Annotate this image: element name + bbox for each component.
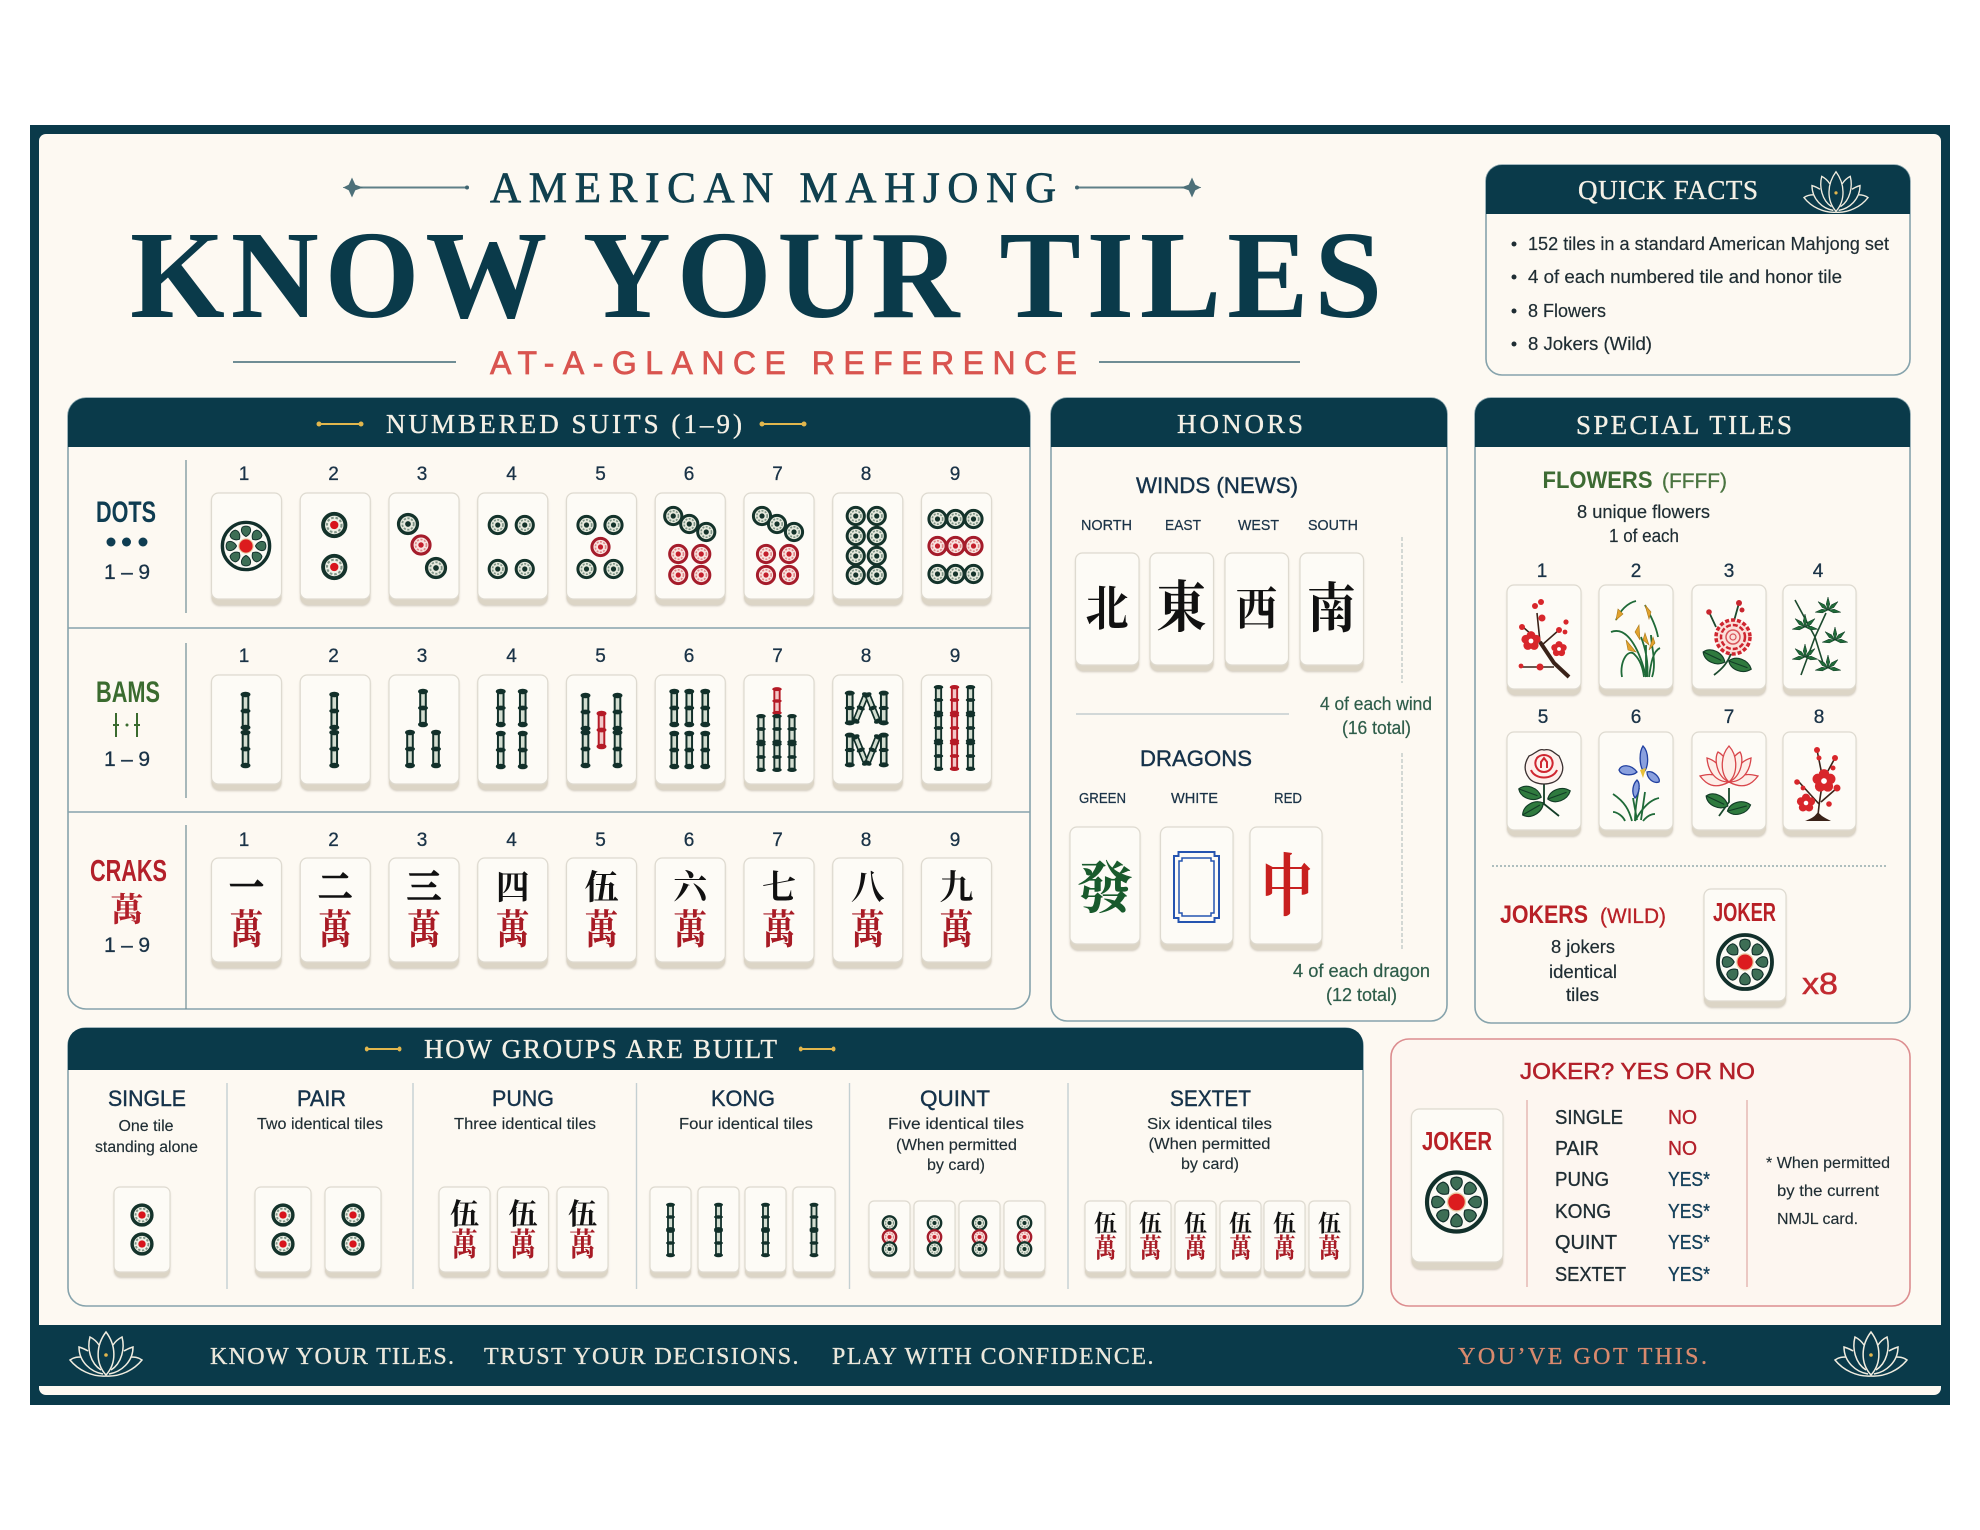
tile: quint 1	[869, 1201, 910, 1277]
note: winds count	[1320, 694, 1432, 738]
tile: quint 3	[959, 1201, 1000, 1277]
column: kong	[650, 1086, 835, 1277]
row numbers: craks: 5	[595, 830, 606, 851]
tile: 4 crak	[478, 858, 548, 968]
tile: 8 crak: 萬	[851, 908, 884, 954]
tile: pung 3	[557, 1187, 608, 1277]
heading: joker yes or no: JOKER? YES OR NO	[1520, 1058, 1755, 1084]
tile: 2 crak: 萬	[319, 908, 352, 954]
tile: 5 crak: 伍	[584, 869, 618, 907]
tile: sextet 4: 伍	[1229, 1211, 1252, 1236]
tile: 7 crak: 七	[762, 870, 796, 907]
column: pung: Three identical tiles	[454, 1116, 596, 1133]
tile: pair 1	[255, 1187, 311, 1277]
tile: pung 2: 萬	[510, 1227, 536, 1263]
row numbers: bams: 2	[328, 646, 339, 667]
tile: 7 dots	[744, 493, 814, 605]
note: dragons count	[1293, 961, 1430, 1005]
text block: facts: 8 Flowers	[1528, 301, 1606, 321]
tile: flower 4 bamboo	[1783, 585, 1856, 695]
tile: 9 crak: 萬	[940, 908, 973, 954]
flower numbers bottom: 7	[1724, 707, 1734, 728]
row numbers: bams: 1	[239, 646, 249, 667]
wind labels: WEST	[1238, 517, 1279, 534]
heading: quick facts: QUICK FACTS	[1578, 175, 1758, 205]
table: joker rules: SEXTET	[1555, 1264, 1626, 1286]
tile: 2 crak: 二	[318, 870, 352, 907]
tile: joker: JOKER	[1713, 897, 1776, 927]
tile: 3 crak: 三	[407, 870, 441, 907]
note: dragons count: 4 of each dragon	[1293, 961, 1430, 981]
tile: joker large	[1412, 1109, 1503, 1269]
text block: jokers note: tiles	[1566, 985, 1599, 1005]
tile: 9 crak: 九	[940, 869, 974, 907]
table: joker rules: KONG	[1555, 1201, 1611, 1223]
tile: east	[1150, 553, 1214, 671]
tile: pung 3: 萬	[569, 1227, 596, 1263]
tile: green dragon	[1070, 827, 1140, 950]
tile: sextet 5: 伍	[1273, 1211, 1296, 1236]
tile: 3 bams	[389, 675, 459, 790]
table: joker rules: SINGLE	[1555, 1107, 1623, 1129]
tile: pung 2: 伍	[508, 1198, 538, 1231]
column: pair: Two identical tiles	[257, 1116, 383, 1133]
flower numbers bottom: 5	[1538, 707, 1548, 728]
tile: flower 5 peony	[1507, 732, 1581, 836]
flower numbers top: 2	[1631, 561, 1641, 582]
footnote	[1766, 1155, 1890, 1228]
row label: craks	[90, 853, 167, 957]
tile: 6 crak: 六	[673, 869, 710, 907]
flower numbers bottom: 6	[1631, 707, 1641, 728]
dragon labels	[1079, 790, 1302, 807]
tile: pair 2	[325, 1187, 381, 1277]
tile: sextet 3: 萬	[1185, 1235, 1206, 1264]
tile: kong 4	[793, 1187, 835, 1277]
row numbers: craks: 1	[239, 830, 249, 851]
panel: honors	[1051, 398, 1447, 1021]
tile: sextet 5	[1264, 1201, 1305, 1277]
row numbers: dots: 7	[772, 464, 783, 485]
text block: flowers note: 8 unique flowers	[1577, 502, 1710, 522]
title block	[130, 165, 1388, 381]
tile: 1 bam	[212, 675, 282, 790]
row numbers: bams: 8	[861, 646, 871, 667]
tile: 3 crak	[389, 858, 459, 968]
rule right	[1099, 361, 1300, 363]
overline: AMERICAN MAHJONG	[490, 165, 1056, 212]
tile: sextet 6	[1309, 1201, 1350, 1277]
multiplier: x8	[1802, 966, 1838, 1001]
column: quint: (When permitted	[896, 1137, 1017, 1154]
tile: south: 南	[1307, 580, 1356, 640]
tile: 8 crak: 八	[851, 870, 885, 907]
callout: you have got this: YOU’VE GOT THIS.	[1458, 1344, 1707, 1370]
tile: 3 dots	[389, 493, 459, 605]
tile: south	[1300, 553, 1364, 671]
tile: 8 dots	[833, 493, 903, 605]
text block: jokers note: identical	[1549, 962, 1617, 982]
tile: 5 dots	[566, 493, 636, 605]
tile: 4 bams	[478, 675, 548, 790]
table: joker rules: YES*	[1668, 1169, 1710, 1191]
row numbers: bams	[239, 646, 960, 667]
row: dragon tiles	[1070, 827, 1322, 950]
column: quint: by card)	[927, 1157, 985, 1174]
tile: 1 dot	[212, 493, 282, 605]
table: joker rules: NO	[1668, 1138, 1697, 1160]
row numbers: dots: 4	[506, 464, 517, 485]
row numbers: dots: 8	[861, 464, 871, 485]
tile: sextet 3	[1175, 1201, 1216, 1277]
row numbers: dots: 9	[950, 464, 960, 485]
row label: dots	[96, 496, 156, 584]
text block: facts	[1512, 234, 1889, 354]
flower numbers top: 4	[1813, 561, 1824, 582]
row: dots tiles	[212, 493, 992, 605]
tile: quint 2	[914, 1201, 955, 1277]
tile: 7 crak	[744, 858, 814, 968]
tile: pung 1: 伍	[450, 1198, 479, 1231]
tagline: PLAY WITH CONFIDENCE.	[832, 1344, 1154, 1370]
tile: 4 crak: 四	[496, 870, 530, 907]
rule left	[233, 361, 456, 363]
tile: pung 3: 伍	[568, 1198, 597, 1231]
subtitle: AT-A-GLANCE REFERENCE	[490, 345, 1077, 381]
text block: jokers note	[1549, 937, 1617, 1005]
tile: pung 2	[498, 1187, 548, 1277]
flower numbers top: 3	[1724, 561, 1734, 582]
footnote: by the current	[1777, 1183, 1880, 1200]
tile: 3 crak: 萬	[407, 908, 441, 954]
table: joker rules: PAIR	[1555, 1138, 1599, 1160]
row numbers: dots	[239, 464, 960, 485]
column: quint: Five identical tiles	[888, 1116, 1024, 1133]
row numbers: bams: 5	[595, 646, 606, 667]
tile: north	[1076, 553, 1139, 671]
column: single: SINGLE	[108, 1086, 186, 1111]
tile: flower 7 lotus	[1692, 732, 1766, 836]
tile: flower 3 chrysanthemum	[1692, 585, 1766, 695]
row label: craks: 1–9	[104, 934, 150, 957]
footer band	[30, 1325, 1950, 1386]
text block: facts: 4 of each numbered tile and honor tile	[1528, 267, 1842, 287]
tile: 7 bams	[744, 675, 814, 790]
tile: 7 crak: 萬	[762, 908, 796, 954]
footnote: NMJL card.	[1777, 1211, 1858, 1228]
tile: 4 dots	[478, 493, 548, 605]
column: sextet: SEXTET	[1170, 1086, 1251, 1111]
row numbers: dots: 1	[239, 464, 249, 485]
tile: west	[1225, 553, 1288, 671]
tile: 8 bams	[833, 675, 903, 790]
column: single: One tile	[118, 1118, 174, 1135]
wind labels	[1081, 517, 1358, 534]
tile: 2 bams	[300, 675, 370, 790]
subheading: dragons: DRAGONS	[1140, 746, 1252, 771]
tile: 6 bams	[655, 675, 725, 790]
row label: craks: 萬	[110, 892, 144, 929]
subheading: jokers: (WILD)	[1600, 905, 1666, 928]
row numbers: dots: 2	[328, 464, 339, 485]
column: kong: KONG	[711, 1086, 775, 1111]
ornament: left arrow	[316, 422, 364, 426]
tile: 5 crak	[566, 858, 636, 968]
tile: pung 1: 萬	[451, 1227, 478, 1263]
panel: special tiles	[1475, 398, 1910, 1023]
row label: dots: 1–9	[104, 561, 150, 584]
tile: 9 bams	[922, 675, 992, 790]
tile: sextet 4	[1220, 1201, 1261, 1277]
flower numbers top: 1	[1537, 561, 1547, 582]
row numbers: craks: 7	[772, 830, 783, 851]
row label: bams: 1–9	[104, 748, 150, 771]
subheading: flowers: FLOWERS	[1542, 467, 1652, 494]
ornament: right arrow	[760, 422, 806, 426]
column: pair	[255, 1086, 383, 1277]
row numbers: craks	[239, 830, 960, 851]
subheading: winds: WINDS (NEWS)	[1136, 473, 1298, 498]
tile: 1 crak: 一	[230, 870, 264, 907]
tile: 9 crak	[922, 858, 992, 968]
ornament: top left rule	[343, 178, 469, 196]
wind labels: EAST	[1165, 517, 1201, 534]
tile: 5 bams	[566, 675, 636, 790]
tagline: KNOW YOUR TILES.	[210, 1344, 454, 1370]
tagline	[210, 1344, 1154, 1370]
tile: east: 東	[1156, 578, 1207, 640]
table: joker rules: YES*	[1668, 1232, 1710, 1254]
icon: lotus right	[1835, 1332, 1907, 1376]
table: joker rules: PUNG	[1555, 1169, 1609, 1191]
column: sextet	[1085, 1086, 1350, 1277]
column: single	[95, 1086, 198, 1277]
row numbers: craks: 9	[950, 830, 960, 851]
tile: kong 3	[745, 1187, 786, 1277]
tile: white dragon	[1160, 827, 1233, 950]
flower numbers bottom	[1538, 707, 1824, 728]
dragon labels: RED	[1274, 790, 1302, 807]
tile: 2 crak	[300, 858, 370, 968]
row label: dots: DOTS	[96, 496, 156, 529]
tile: sextet 1: 伍	[1094, 1211, 1117, 1236]
column: pair: PAIR	[297, 1086, 346, 1111]
row numbers: craks: 4	[506, 830, 517, 851]
tile: sextet 2: 伍	[1139, 1211, 1162, 1236]
tile: kong 2	[698, 1187, 739, 1277]
tile: sextet 6: 萬	[1319, 1235, 1340, 1264]
tile: joker large: JOKER	[1422, 1126, 1492, 1156]
panel: joker yes or no	[1391, 1039, 1910, 1306]
row label: craks: CRAKS	[90, 853, 167, 888]
tile: 6 crak	[655, 858, 725, 968]
row numbers: bams: 6	[684, 646, 694, 667]
tile: 4 crak: 萬	[496, 908, 529, 954]
ornament: right arrow	[799, 1046, 835, 1052]
tile: single	[114, 1187, 170, 1277]
tile: quint 4	[1004, 1201, 1045, 1277]
icon: lotus left	[70, 1332, 142, 1376]
text block: facts: 152 tiles in a standard American Mahjong set	[1528, 234, 1889, 254]
tile: flower 2 orchid	[1599, 585, 1673, 695]
tile: flower 1 plum	[1507, 585, 1581, 695]
row label: bams	[96, 676, 160, 771]
tile: sextet 2	[1130, 1201, 1171, 1277]
column: sextet: Six identical tiles	[1147, 1116, 1272, 1133]
dragon labels: WHITE	[1171, 790, 1218, 807]
row: craks tiles	[212, 858, 992, 968]
tile: sextet 4: 萬	[1230, 1235, 1251, 1264]
row numbers: dots: 6	[684, 464, 694, 485]
ornament: left arrow	[365, 1046, 401, 1052]
main title: KNOW YOUR TILES	[130, 207, 1388, 345]
table: joker rules: NO	[1668, 1107, 1697, 1129]
tile: 2 dots	[300, 493, 370, 605]
tile: 6 crak: 萬	[674, 908, 707, 954]
icon: lotus	[1804, 172, 1868, 212]
tile: 6 dots	[655, 493, 725, 605]
row: wind tiles	[1076, 553, 1364, 671]
text block: flowers note: 1 of each	[1609, 526, 1679, 546]
table: joker rules: YES*	[1668, 1264, 1710, 1286]
panel: how groups are built	[68, 1028, 1363, 1306]
flower numbers top	[1537, 561, 1824, 582]
footnote: * When permitted	[1766, 1155, 1890, 1172]
column: pung	[439, 1086, 608, 1277]
wind labels: SOUTH	[1308, 517, 1358, 534]
tile: 8 crak	[833, 858, 903, 968]
column: quint	[869, 1086, 1045, 1277]
note: winds count: (16 total)	[1342, 718, 1411, 738]
row: bams tiles	[212, 675, 992, 790]
tile: 1 crak	[212, 858, 282, 968]
tile: red dragon: 中	[1261, 850, 1313, 926]
tile: red dragon	[1250, 827, 1322, 950]
row numbers: craks: 8	[861, 830, 871, 851]
heading: special tiles: SPECIAL TILES	[1576, 410, 1792, 440]
tile: sextet 1	[1085, 1201, 1126, 1277]
tile: sextet 3: 伍	[1184, 1211, 1207, 1236]
row numbers: craks: 6	[684, 830, 694, 851]
row numbers: dots: 5	[595, 464, 606, 485]
column: single: standing alone	[95, 1139, 198, 1156]
tile: 5 crak: 萬	[585, 908, 618, 954]
tile: west: 西	[1236, 585, 1277, 636]
row numbers: dots: 3	[417, 464, 427, 485]
note: dragons count: (12 total)	[1326, 985, 1397, 1005]
footer cream strip	[39, 1386, 1941, 1395]
wind labels: NORTH	[1081, 517, 1132, 534]
tile: sextet 6: 伍	[1318, 1211, 1341, 1236]
subheading: flowers	[1542, 467, 1727, 494]
row numbers: craks: 3	[417, 830, 427, 851]
tile: 1 crak: 萬	[230, 908, 263, 954]
text block: jokers note: 8 jokers	[1551, 937, 1615, 957]
table: joker rules: QUINT	[1555, 1232, 1617, 1254]
text block: facts: 8 Jokers (Wild)	[1528, 334, 1652, 354]
subheading: jokers: JOKERS	[1500, 901, 1588, 929]
table: joker rules: YES*	[1668, 1201, 1710, 1223]
tile: flower 8 plum	[1783, 732, 1856, 836]
subheading: jokers	[1500, 901, 1666, 929]
tile: flower 6 iris	[1599, 732, 1673, 836]
note: winds count: 4 of each wind	[1320, 694, 1432, 714]
column: sextet: by card)	[1181, 1156, 1239, 1173]
row numbers: bams: 9	[950, 646, 960, 667]
text block: flowers note	[1577, 502, 1710, 546]
row numbers: bams: 4	[506, 646, 517, 667]
table: joker rules	[1555, 1107, 1710, 1286]
ornament: top right rule	[1075, 178, 1201, 196]
row label: bams: BAMS	[96, 676, 160, 709]
tile: north: 北	[1085, 582, 1129, 636]
tile: joker	[1704, 889, 1786, 1007]
tile: pung 1	[439, 1187, 490, 1277]
row numbers: craks: 2	[328, 830, 339, 851]
tile: green dragon: 發	[1077, 859, 1133, 921]
panel: numbered suits	[68, 398, 1030, 1009]
cream sheet	[39, 134, 1941, 1344]
heading: numbered suits: NUMBERED SUITS (1–9)	[386, 409, 742, 439]
column: quint: QUINT	[920, 1086, 990, 1111]
row numbers: bams: 7	[772, 646, 783, 667]
tile: 9 dots	[922, 493, 992, 605]
tile: sextet 1: 萬	[1095, 1235, 1116, 1264]
panel: quick facts	[1486, 165, 1910, 375]
column: sextet: (When permitted	[1148, 1136, 1270, 1153]
dragon labels: GREEN	[1079, 790, 1126, 807]
subheading: flowers: (FFFF)	[1662, 470, 1727, 493]
heading: honors: HONORS	[1177, 409, 1303, 439]
tagline: TRUST YOUR DECISIONS.	[484, 1344, 798, 1370]
tile: sextet 2: 萬	[1140, 1235, 1161, 1264]
heading: how groups: HOW GROUPS ARE BUILT	[424, 1034, 778, 1064]
flower numbers bottom: 8	[1814, 707, 1824, 728]
tile: kong 1	[650, 1187, 691, 1277]
column: pung: PUNG	[492, 1086, 554, 1111]
row numbers: bams: 3	[417, 646, 427, 667]
tile: sextet 5: 萬	[1274, 1235, 1295, 1264]
column: kong: Four identical tiles	[679, 1116, 813, 1133]
